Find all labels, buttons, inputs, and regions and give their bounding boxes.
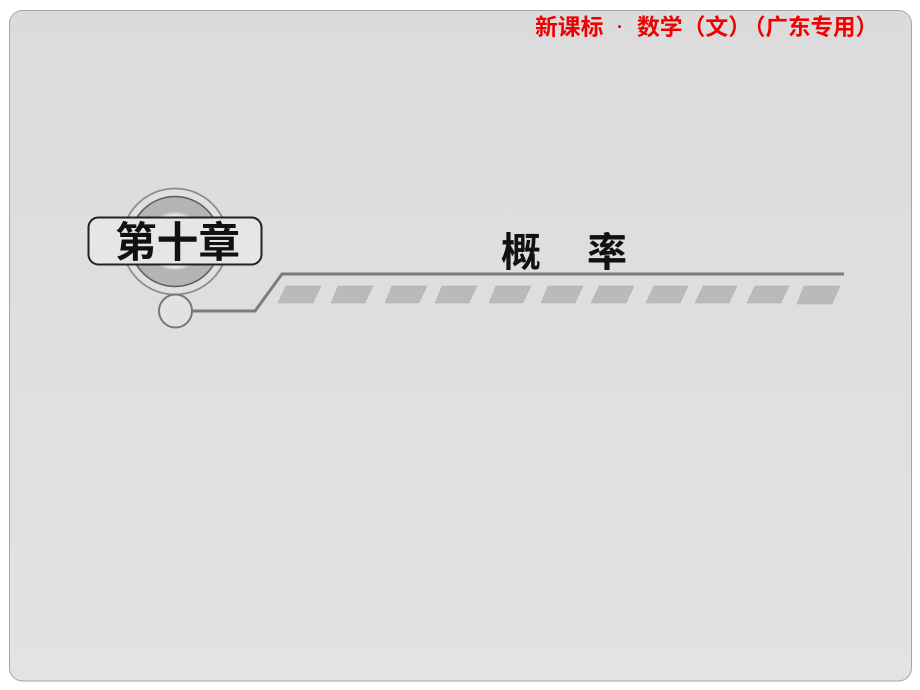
header: course label [535,14,878,40]
header: course label: （广东专用） [743,15,878,40]
header: course label: 数学（文） [637,14,751,40]
connector line [192,274,844,311]
chapter label box: 第十章 [115,219,240,266]
icon: concentric chapter circle [122,188,228,294]
header: course label: · [617,17,623,37]
decorative parallelogram strip [278,286,840,304]
icon: small connector circle [159,294,192,328]
title second character: 率 [587,231,627,275]
header: course label: 新课标 [535,14,604,40]
title: 概 [501,231,541,275]
